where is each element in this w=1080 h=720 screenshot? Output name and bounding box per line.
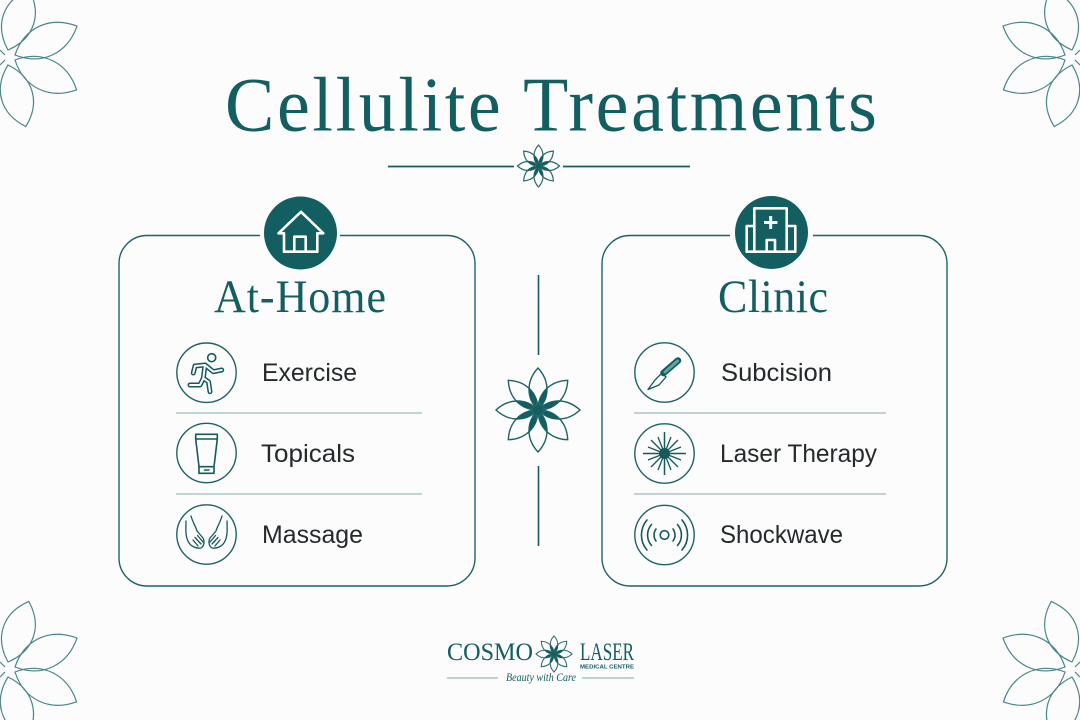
center flower [496, 368, 580, 452]
logo: Cosmo Laser Medical Centre: COSMO [447, 639, 533, 666]
item: Massage: Massage [262, 521, 363, 549]
decoration: bottom-left corner flower [0, 596, 84, 720]
item: Subcision: Subcision [721, 359, 832, 387]
title: Cellulite Treatments [225, 63, 877, 148]
item: Shockwave: Shockwave [720, 521, 843, 549]
item: Shockwave [635, 505, 843, 565]
logo: Cosmo Laser Medical Centre: LASER [580, 639, 634, 666]
item: Topicals [177, 423, 355, 483]
logo flower [536, 636, 572, 672]
decoration: top-right corner flower [996, 0, 1080, 131]
item: Exercise: Exercise [262, 359, 357, 387]
logo: Cosmo Laser Medical Centre: MEDICAL CENTRE [580, 664, 634, 670]
item: Massage [177, 505, 363, 564]
heading: At-Home: At-Home [214, 271, 386, 322]
logo: Cosmo Laser Medical Centre [447, 636, 634, 684]
item: Laser Therapy: Laser Therapy [720, 440, 877, 468]
decoration: bottom-right corner flower [996, 596, 1080, 720]
item: Exercise [177, 343, 357, 402]
icon: house badge [264, 196, 337, 270]
title divider with flower [388, 145, 690, 187]
center divider lines [538, 275, 540, 546]
icon: hospital badge [735, 196, 808, 269]
panel: Clinic [602, 196, 947, 586]
item: Topicals: Topicals [261, 440, 355, 468]
decoration: top-left corner flower [0, 0, 84, 131]
panel: At-Home [119, 196, 475, 586]
item: Subcision [635, 343, 832, 402]
item: Laser Therapy [635, 424, 877, 483]
logo: Cosmo Laser Medical Centre: Beauty with Care [506, 670, 577, 684]
heading: Clinic: Clinic [718, 271, 828, 322]
